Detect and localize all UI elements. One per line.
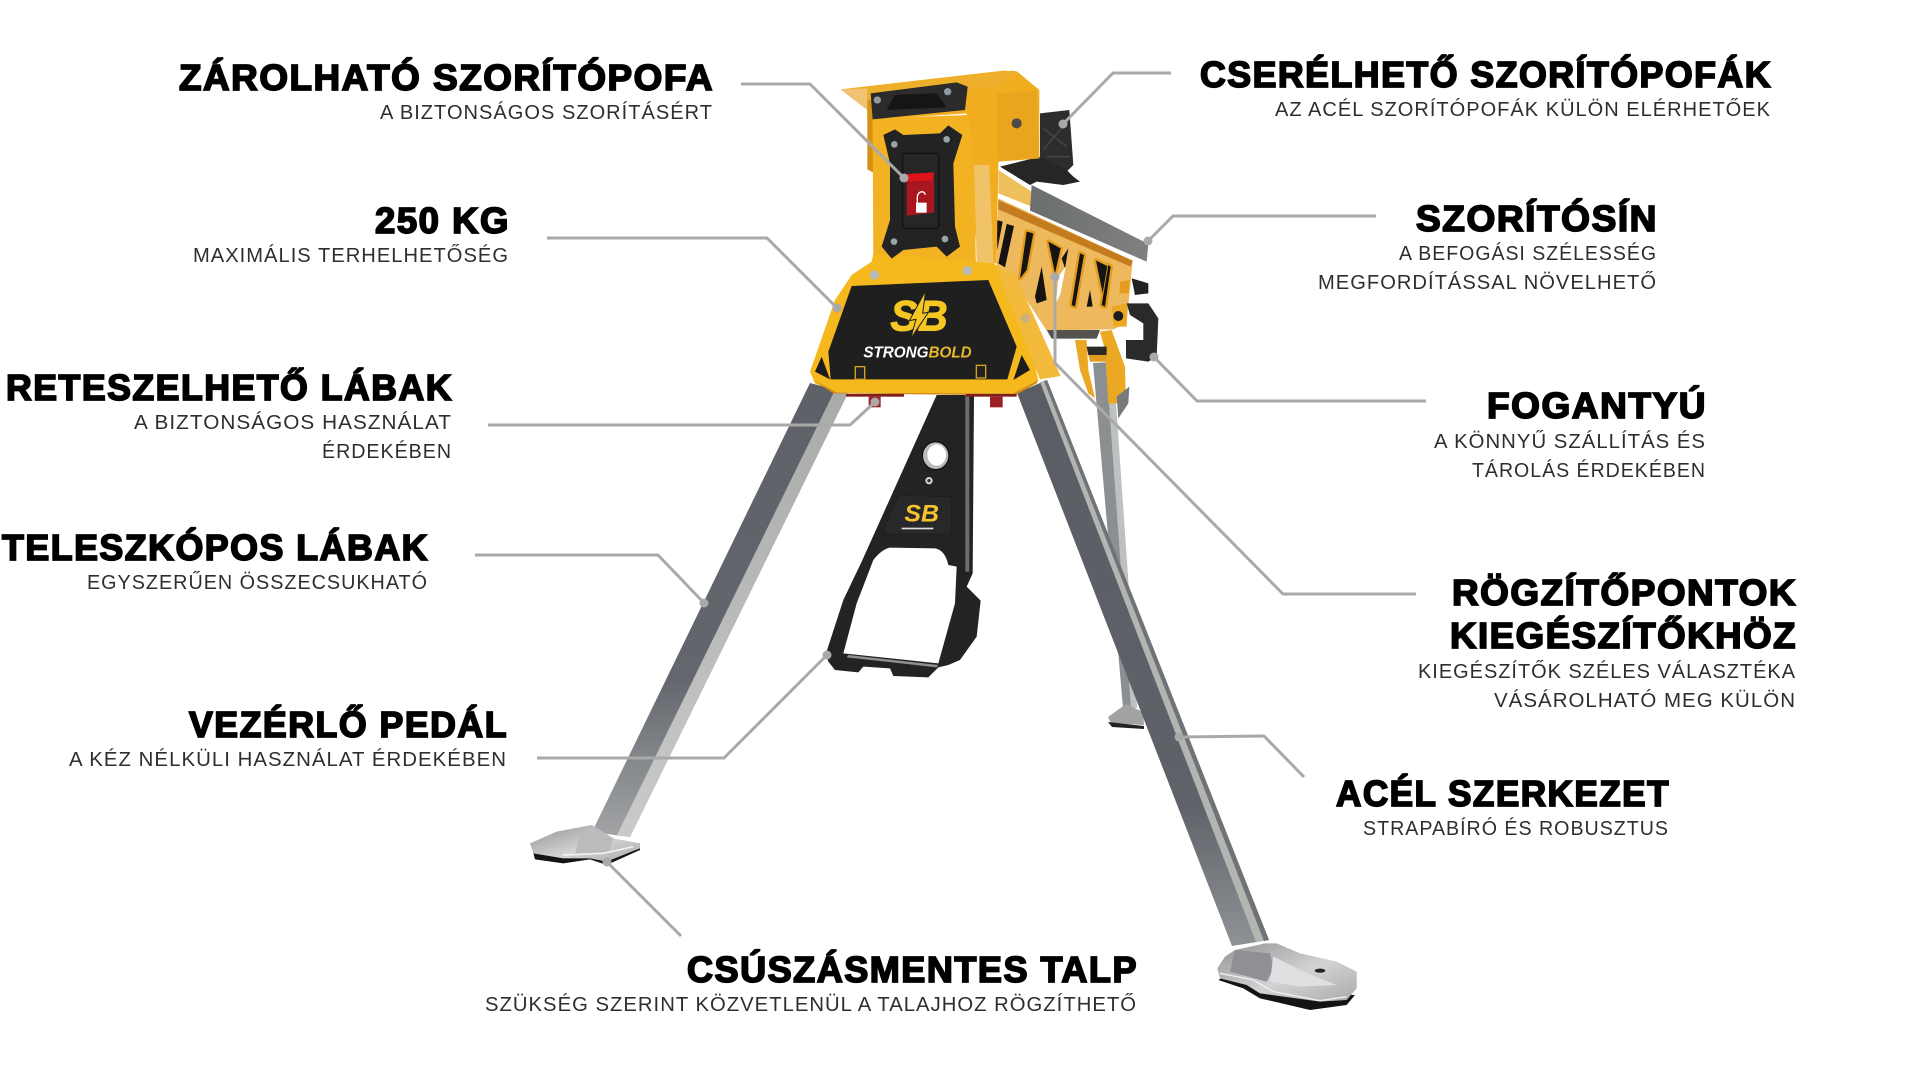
leader: fogantyú bbox=[1150, 352, 1426, 401]
leader: teleszkópos lábak bbox=[475, 555, 708, 608]
label: vezérlő pedál: VEZÉRLŐ PEDÁL bbox=[189, 703, 508, 745]
label: fogantyú: FOGANTYÚ bbox=[1487, 384, 1707, 426]
control pedal bbox=[826, 395, 981, 677]
truss slots bbox=[997, 220, 1111, 307]
rear rail truss bbox=[997, 170, 1133, 418]
label: zárolható szorítópofa: ZÁROLHATÓ SZORÍTÓPOFA bbox=[179, 56, 714, 98]
small icons bbox=[855, 367, 865, 379]
label: cserélhető szorítópofák bbox=[1200, 53, 1772, 121]
back telescopic leg bbox=[1093, 362, 1144, 729]
leader: szorítósín bbox=[1144, 216, 1376, 246]
label: vezérlő pedál: A KÉZ NÉLKÜLI HASZNÁLAT ÉRDEKÉBEN bbox=[69, 748, 507, 771]
product: workbench illustration bbox=[530, 71, 1357, 1010]
label: reteszelhető lábak: A BIZTONSÁGOS HASZNÁLAT bbox=[134, 411, 452, 434]
transport handle bbox=[1113, 278, 1158, 362]
label: cserélhető szorítópofák: AZ ACÉL SZORÍTÓPOFÁK KÜLÖN ELÉRHETŐEK bbox=[1275, 98, 1771, 121]
leader: cserélhető szorítópofák bbox=[1058, 73, 1171, 128]
label: szorítósín: SZORÍTÓSÍN bbox=[1416, 197, 1658, 239]
control pedal: SB bbox=[904, 501, 939, 528]
non-slip foot right bbox=[1217, 943, 1357, 1010]
corner triangles bbox=[815, 357, 830, 379]
leader: rögzítőpontok bbox=[1050, 272, 1416, 594]
brand logo mark: SB bbox=[890, 293, 948, 341]
black panel bbox=[828, 280, 1017, 379]
red lock latch bbox=[907, 181, 934, 216]
lock plate bbox=[882, 125, 962, 259]
clamp jaws bbox=[1000, 110, 1080, 185]
label: vezérlő pedál bbox=[69, 703, 508, 771]
leader: acél szerkezet bbox=[1174, 732, 1304, 777]
front column bbox=[873, 115, 976, 270]
truss slot outlines bbox=[1020, 232, 1111, 307]
label: fogantyú bbox=[1434, 384, 1707, 482]
label: szorítósín: A BEFOGÁSI SZÉLESSÉG bbox=[1399, 242, 1657, 265]
top handle bbox=[871, 82, 968, 119]
leader: 250 kg bbox=[547, 238, 842, 312]
label: rögzítőpontok kiegészítőkhöz: KIEGÉSZÍTŐKHÖZ bbox=[1450, 614, 1797, 656]
label: szorítósín: MEGFORDÍTÁSSAL NÖVELHETŐ bbox=[1318, 271, 1657, 294]
base shell bbox=[810, 253, 1038, 393]
label: 250 kg bbox=[193, 200, 510, 267]
label: reteszelhető lábak: ÉRDEKÉBEN bbox=[322, 440, 452, 463]
leg latches bbox=[846, 394, 1017, 407]
label: fogantyú: A KÖNNYŰ SZÁLLÍTÁS ÉS bbox=[1434, 430, 1706, 453]
label: 250 kg: 250 KG bbox=[375, 200, 510, 241]
brand wordmark: STRONGBOLD bbox=[863, 344, 972, 361]
label: szorítósín bbox=[1318, 197, 1658, 294]
label: csúszásmentes talp: CSÚSZÁSMENTES TALP bbox=[687, 948, 1138, 990]
label: teleszkópos lábak: EGYSZERŰEN ÖSSZECSUKHATÓ bbox=[87, 571, 428, 594]
label: reteszelhető lábak bbox=[6, 366, 453, 463]
left steel leg bbox=[592, 383, 848, 837]
label: teleszkópos lábak: TELESZKÓPOS LÁBAK bbox=[2, 526, 429, 568]
yellow body bbox=[810, 71, 1061, 407]
label: rögzítőpontok kiegészítőkhöz bbox=[1418, 571, 1797, 712]
panel screws bbox=[870, 266, 972, 280]
leader: zárolható szorítópofa bbox=[741, 84, 908, 182]
top plate bbox=[841, 71, 1039, 263]
label: 250 kg: MAXIMÁLIS TERHELHETŐSÉG bbox=[193, 244, 509, 267]
label: rögzítőpontok kiegészítőkhöz: RÖGZÍTŐPONTOK bbox=[1452, 571, 1797, 613]
label: zárolható szorítópofa: A BIZTONSÁGOS SZORÍTÁSÉRT bbox=[380, 101, 713, 124]
label: reteszelhető lábak: RETESZELHETŐ LÁBAK bbox=[6, 366, 453, 408]
label: acél szerkezet bbox=[1336, 773, 1670, 840]
label: acél szerkezet: STRAPABÍRÓ ÉS ROBUSZTUS bbox=[1363, 817, 1669, 840]
label: fogantyú: TÁROLÁS ÉRDEKÉBEN bbox=[1472, 459, 1706, 482]
leader lines and markers bbox=[475, 73, 1426, 936]
label: csúszásmentes talp: SZÜKSÉG SZERINT KÖZVETLENÜL A TALAJHOZ RÖGZÍTHETŐ bbox=[485, 993, 1137, 1016]
label: cserélhető szorítópofák: CSERÉLHETŐ SZORÍTÓPOFÁK bbox=[1200, 53, 1772, 95]
label: teleszkópos lábak bbox=[2, 526, 429, 594]
leader: csúszásmentes talp bbox=[602, 858, 681, 936]
right steel leg bbox=[1017, 380, 1269, 946]
non-slip foot left bbox=[530, 825, 640, 865]
label: rögzítőpontok kiegészítőkhöz: KIEGÉSZÍTŐK SZÉLES VÁLASZTÉKA bbox=[1418, 660, 1796, 683]
label: csúszásmentes talp bbox=[485, 948, 1138, 1016]
clamp rail bbox=[1030, 185, 1148, 262]
leader: vezérlő pedál bbox=[537, 650, 832, 758]
label: zárolható szorítópofa bbox=[179, 56, 714, 124]
label: acél szerkezet: ACÉL SZERKEZET bbox=[1336, 773, 1670, 814]
leader: reteszelhető lábak bbox=[488, 398, 880, 425]
label: rögzítőpontok kiegészítőkhöz: VÁSÁROLHATÓ MEG KÜLÖN bbox=[1494, 689, 1796, 712]
